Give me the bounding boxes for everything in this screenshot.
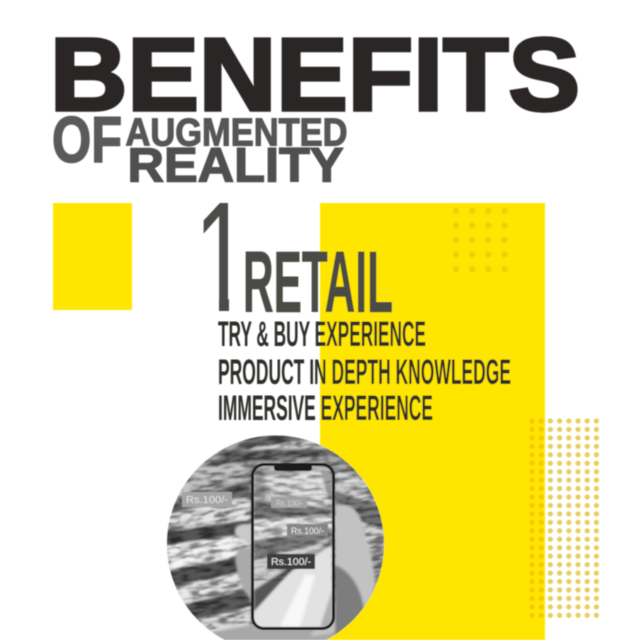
photo: supermarket AR scene: [166, 434, 385, 640]
page content: RETAIL: [243, 234, 393, 331]
shelves background: [166, 434, 385, 640]
shelf texture: [166, 435, 385, 630]
price tag: top in phone: Rs.100/-: [276, 499, 303, 508]
benefit: immersive: IMMERSIVE EXPERIENCE: [218, 389, 433, 428]
yellow panel: large: [320, 203, 545, 640]
yellow block: left: [53, 203, 132, 310]
subtitle: of: OF: [52, 103, 122, 176]
dot grid: top of yellow panel: [452, 207, 517, 280]
phone screen: [254, 466, 332, 627]
price tag: middle in phone: Rs.100/-: [291, 526, 324, 536]
subtitle: augmented: AUGMENTED: [126, 112, 348, 154]
page content: TRY & BUY EXPERIENCE: [218, 315, 426, 354]
price tag: middle in phone: [287, 524, 328, 536]
price tag: outside phone: [182, 492, 232, 507]
price tag: lower in phone: Rs.100/-: [271, 557, 311, 568]
phone notch: [274, 464, 312, 471]
title: benefits: BENEFITS: [50, 17, 580, 132]
screen texture: [254, 466, 332, 581]
dot grid: right, over white: [545, 417, 601, 620]
price tag: top in phone: [271, 497, 307, 508]
icon: smartphone: [251, 463, 335, 630]
section number: 1: 1: [194, 169, 250, 344]
hand: [235, 504, 375, 636]
dot grid: right, over yellow: [528, 417, 545, 620]
price tag: outside phone: Rs.100/-: [186, 495, 228, 506]
subtitle: reality: REALITY: [128, 140, 344, 192]
price tag: lower in phone: [267, 554, 315, 569]
